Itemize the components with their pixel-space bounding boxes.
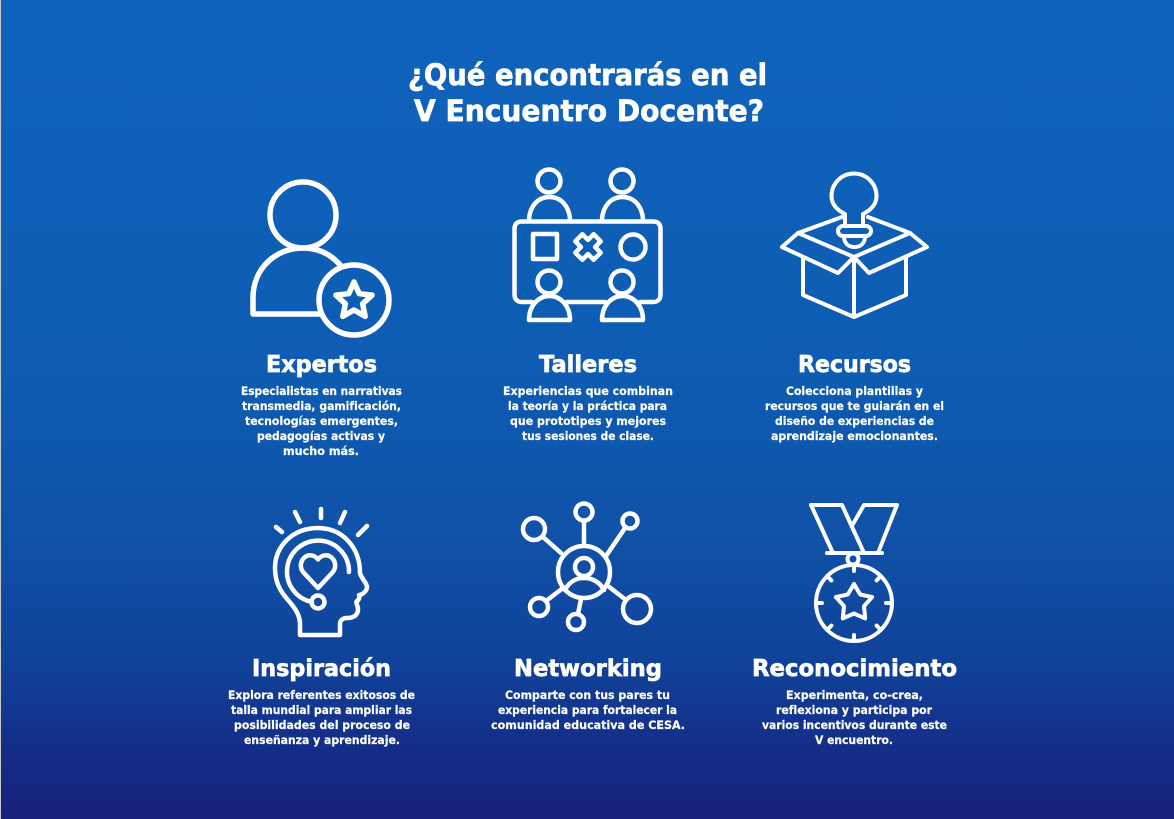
icon: network of people (523, 504, 651, 630)
text: Inspiración description: enseñanza y aprendizaje. (244, 733, 400, 747)
icon: box with light bulb (782, 174, 927, 317)
heading: Reconocimiento: Reconocimiento (752, 656, 957, 682)
text: Networking description (491, 688, 685, 732)
heading: Recursos: Recursos (798, 352, 911, 378)
heading: Expertos: Expertos (266, 352, 377, 378)
text: Talleres description: tus sesiones de clase. (522, 429, 654, 443)
text: Expertos description: Especialistas en narrativas (241, 384, 402, 398)
title (408, 58, 767, 128)
heading: Inspiración: Inspiración (252, 656, 391, 682)
text: Reconocimiento description: V encuentro. (815, 733, 893, 747)
heading: Networking: Networking (514, 656, 662, 682)
text: Inspiración description: Explora referentes exitosos de (228, 688, 415, 702)
text: Expertos description: mucho más. (283, 444, 359, 458)
text: Expertos description: pedagogías activas y (257, 429, 385, 443)
text: Networking description: Comparte con tus pares tu (505, 688, 670, 702)
title: ¿Qué encontrarás en el (408, 58, 767, 92)
icon: head with heart and rays (275, 509, 367, 635)
text: Talleres description (503, 384, 673, 443)
text: Reconocimiento description (762, 688, 947, 747)
text: Expertos description: tecnologías emergentes, (245, 414, 398, 428)
text: Inspiración description: talla mundial para ampliar las (231, 703, 412, 717)
text: Recursos description: aprendizaje emocionantes. (771, 429, 938, 443)
text: Expertos description: transmedia, gamificación, (242, 399, 401, 413)
text: Talleres description: la teoría y la práctica para (508, 399, 667, 413)
text: Inspiración description: posibilidades del proceso de (234, 718, 410, 732)
heading: Talleres: Talleres (539, 352, 637, 378)
icon: workshop table with four people (514, 170, 660, 320)
icon: expert person with star badge (253, 182, 389, 335)
icon: medal with star (811, 505, 897, 641)
text: Talleres description: Experiencias que combinan (503, 384, 673, 398)
text: Reconocimiento description: varios incentivos durante este (762, 718, 947, 732)
text: Networking description: comunidad educativa de CESA. (491, 718, 685, 732)
text: Reconocimiento description: reflexiona y participa por (776, 703, 932, 717)
text: Recursos description: diseño de experiencias de (775, 414, 934, 428)
title: V Encuentro Docente? (414, 94, 764, 128)
text: Recursos description: recursos que te guiarán en el (765, 399, 944, 413)
text: Reconocimiento description: Experimenta, co-crea, (786, 688, 923, 702)
text: Recursos description (765, 384, 944, 443)
text: Expertos description (241, 384, 402, 458)
text: Networking description: experiencia para fortalecer la (498, 703, 677, 717)
text: Recursos description: Colecciona plantillas y (786, 384, 923, 398)
text: Inspiración description (228, 688, 415, 747)
text: Talleres description: que prototipes y mejores (510, 414, 666, 428)
